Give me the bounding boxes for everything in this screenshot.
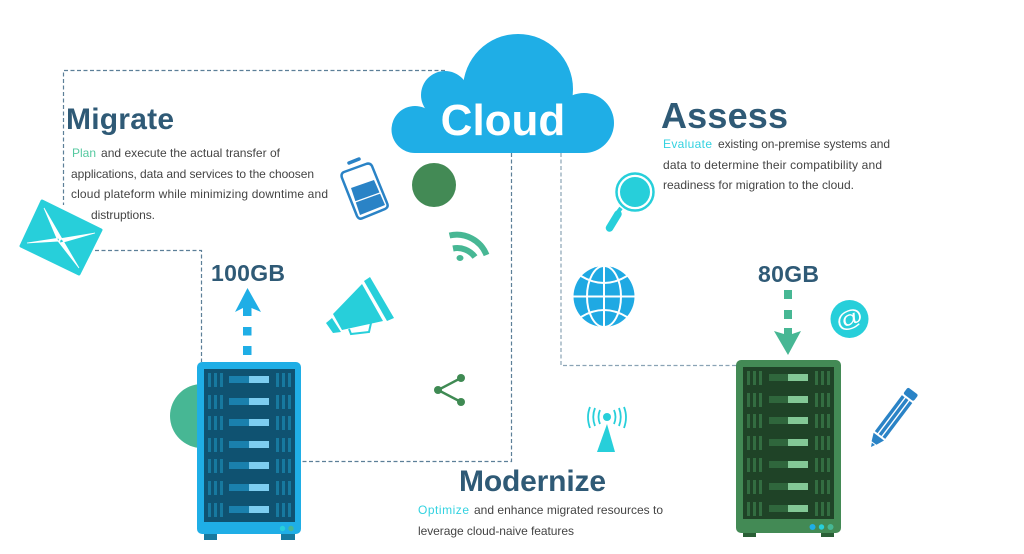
text block: Migrate description: cloud plateform while minimizing downtime and — [71, 187, 328, 201]
connector: envelope to blue server — [95, 250, 202, 362]
heading: Modernize: Modernize — [459, 465, 606, 498]
label: 80GB: 80GB — [758, 261, 819, 287]
text block: Assess description: Evaluate — [663, 137, 712, 151]
panel: Migrate — [66, 103, 328, 222]
connector: cloud to blue server — [301, 153, 512, 462]
icon: magnifying glass — [610, 174, 654, 228]
cloud: Cloud — [441, 96, 565, 145]
icon: at sign: @ — [832, 303, 867, 336]
arrow: down to green server — [774, 290, 801, 355]
panel: Modernize — [418, 465, 663, 538]
text block: Modernize description: leverage cloud-naive features — [418, 524, 574, 538]
icon: envelope — [21, 201, 101, 274]
server: green — [736, 360, 841, 537]
connector: cloud to Migrate — [64, 70, 445, 205]
connector: cloud to green server — [561, 153, 736, 366]
heading: Migrate: Migrate — [66, 103, 174, 136]
server: blue — [197, 362, 301, 540]
text block: Migrate description: distruptions. — [91, 208, 155, 222]
text block: Modernize description — [418, 503, 663, 538]
text block: Migrate description — [71, 146, 328, 222]
arrow: up to 100GB — [235, 288, 261, 355]
text block: Modernize description: Optimize — [418, 503, 469, 517]
icon: wifi — [450, 235, 486, 261]
text block: Modernize description: and enhance migrated resources to — [474, 503, 663, 517]
icon: globe — [573, 266, 635, 327]
text block: Assess description: data to determine their compatibility and — [663, 158, 882, 172]
icon: antenna — [588, 407, 626, 452]
heading: Assess: Assess — [661, 95, 788, 136]
icon: megaphone — [326, 277, 394, 334]
label: 100GB: 100GB — [211, 260, 285, 286]
cloud — [392, 34, 614, 153]
icon: share — [434, 374, 465, 406]
icon: battery — [342, 159, 388, 219]
panel: Assess — [661, 95, 890, 192]
decorative circle: dark green — [412, 163, 456, 207]
text block: Migrate description: Plan — [72, 146, 96, 160]
text block: Assess description: existing on-premise systems and — [718, 137, 890, 151]
text block: Migrate description: and execute the actual transfer of — [101, 146, 281, 160]
icon: pencil — [866, 387, 918, 451]
text block: Assess description — [663, 137, 890, 192]
decorative circle: green behind server — [170, 384, 234, 448]
text block: Migrate description: applications, data and services to the choosen — [71, 167, 314, 181]
text block: Assess description: readiness for migration to the cloud. — [663, 178, 854, 192]
